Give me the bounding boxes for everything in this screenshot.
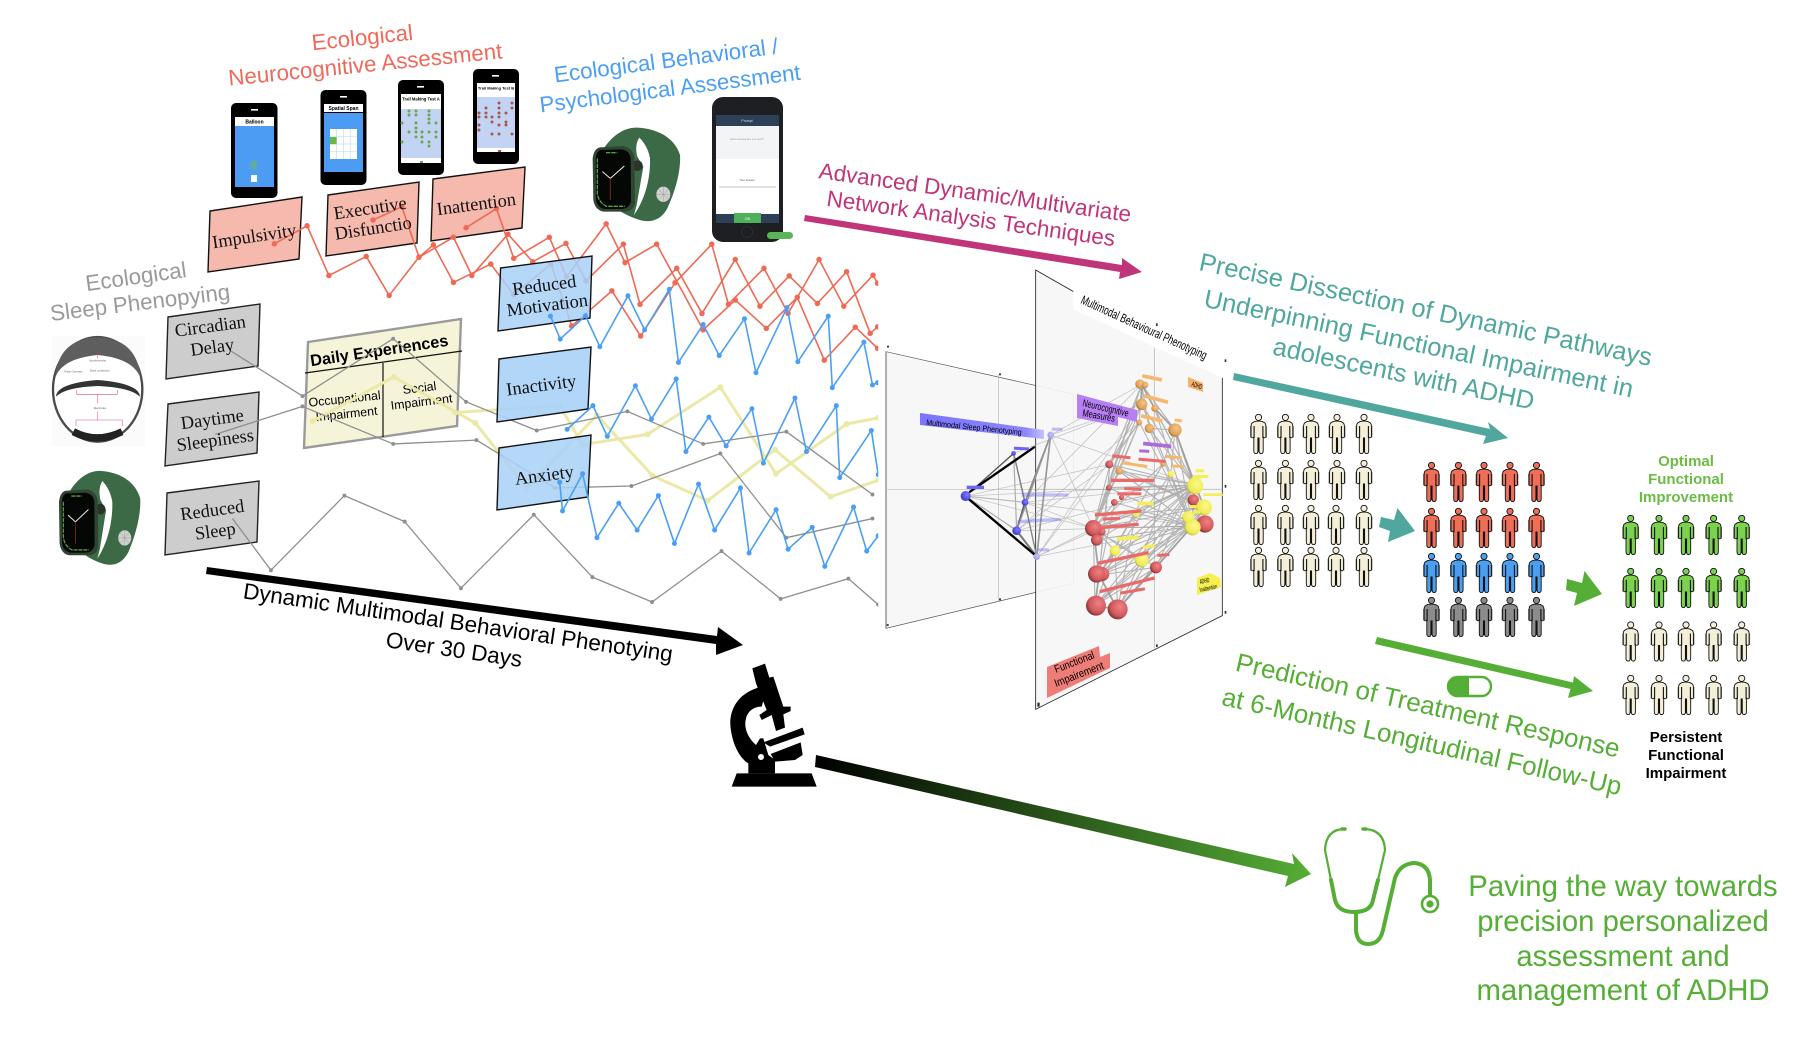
heading: precise dissection of dynamic pathways: Underpinning Functional Impairment in — [1202, 285, 1636, 403]
label: multimodal sleep phenotyping — [920, 413, 1044, 439]
label: ADHD inattention: Inattention — [1199, 583, 1218, 594]
panel: daily experiences: Daily Experiences — [309, 332, 450, 370]
phone: spatial span task — [320, 90, 366, 185]
panel: daily experiences — [304, 319, 462, 448]
arrow: green treatment prediction — [1375, 637, 1593, 698]
heading: precise dissection of dynamic pathways: Precise Dissection of Dynamic Pathways — [1197, 248, 1655, 372]
panel: executive dysfunction — [326, 182, 419, 256]
panel: impulsivity — [208, 197, 302, 272]
panel: daily experiences: Impairment — [390, 391, 454, 413]
panel: daytime sleepiness — [165, 392, 259, 466]
heading: ecological behavioral assessment: Ecological Behavioral / — [553, 34, 780, 87]
label: neurocognitive measures — [1077, 394, 1137, 426]
heading: ecological behavioral assessment — [538, 34, 803, 117]
label: functional impairement — [1047, 646, 1110, 698]
arrow: green small — [1566, 571, 1602, 606]
label: optimal functional improvement: Functional — [1648, 471, 1724, 488]
arrow: dynamic phenotyping black — [206, 567, 743, 655]
network: left plane sleep phenotyping — [886, 346, 1073, 628]
text: paving the way: management of ADHD — [1476, 974, 1770, 1007]
phone: psychological assessment app: How anxious are you now? — [730, 137, 764, 141]
phone: spatial span task: Spatial Span — [328, 106, 359, 112]
labels: symptom domain boxes: Delay — [189, 334, 236, 360]
heading: dynamic multimodal behavioral phenotyping: Dynamic Multimodal Behavioral Phenotying — [242, 579, 675, 667]
label: ADHD inattention: ADHD — [1199, 577, 1210, 586]
label: persistent functional impairment: Persistent — [1650, 729, 1722, 746]
panel: daily experiences: Social — [402, 379, 437, 397]
panel: daily experiences: Impairment — [315, 404, 379, 424]
text: paving the way — [1468, 870, 1778, 1007]
label: optimal functional improvement — [1639, 453, 1733, 506]
phone: trail making test B — [473, 69, 519, 164]
text: paving the way: precision personalized — [1477, 905, 1769, 938]
label: optimal functional improvement: Improvement — [1639, 489, 1733, 506]
panel: anxiety — [497, 435, 591, 510]
panel: daily experiences: Occupational — [308, 388, 381, 410]
label: persistent functional impairment — [1646, 729, 1726, 782]
heading: ecological behavioral assessment: Psychological Assessment — [538, 60, 803, 117]
phone: psychological assessment app: Your answer — [739, 178, 755, 182]
heading: ecological neurocognitive assessment: Ecological — [310, 20, 414, 55]
heading: prediction of treatment response: Prediction of Treatment Response — [1233, 647, 1623, 763]
network: behaviour nodes — [1085, 379, 1214, 619]
icon: sleep headband: Pulse Oximeter — [64, 370, 83, 374]
label: neurocognitive measures: Measures — [1081, 408, 1116, 425]
label: persistent functional impairment: Impairment — [1646, 765, 1726, 782]
network: inter-node edges — [966, 384, 1204, 609]
icon: sleep headband: Bone conduction — [90, 369, 110, 373]
labels: symptom domain boxes — [173, 189, 589, 544]
heading: ecological neurocognitive assessment: Neurocognitive Assessment — [227, 38, 504, 91]
label: optimal functional improvement: Optimal — [1658, 453, 1714, 470]
network: right plane behavioural phenotyping — [1036, 270, 1226, 709]
arrow: multivariate analysis — [804, 215, 1142, 279]
labels: symptom domain boxes: Reduced — [511, 271, 577, 299]
phone: psychological assessment app — [712, 97, 793, 242]
chart: red time series — [274, 207, 878, 360]
label: persistent functional impairment: Functional — [1648, 747, 1724, 764]
heading: precise dissection of dynamic pathways: adolescents with ADHD — [1270, 333, 1537, 416]
arrow: teal to subgroups — [1233, 373, 1508, 444]
label: ADHD — [1188, 377, 1203, 392]
icon: smartwatch large — [593, 128, 680, 221]
labels: symptom domain boxes: Inattention — [435, 189, 517, 219]
panel: inattention — [431, 167, 525, 241]
phone: psychological assessment app: Prompt — [741, 119, 753, 123]
people grid: dissected subgroups — [1424, 462, 1544, 637]
labels: symptom domain boxes: Disfunctio — [333, 212, 413, 244]
labels: symptom domain boxes: Impulsivity — [211, 220, 298, 252]
people grid: treatment outcomes — [1623, 515, 1749, 715]
phone: balloon task: Balloon — [245, 120, 264, 126]
icon: microscope — [730, 664, 817, 787]
labels: symptom domain boxes: Reduced — [179, 496, 245, 524]
label: functional impairement: Impairement — [1053, 660, 1106, 690]
icon: pill — [1448, 677, 1491, 696]
icon: sleep headband — [52, 336, 145, 446]
heading: network analysis techniques: Advanced Dynamic/Multivariate — [817, 158, 1133, 227]
arrow: microscope to stethoscope gradient — [815, 755, 1311, 887]
label: multimodal behavioural phenotyping: Multimodal Behavioural Phenotyping — [1079, 293, 1209, 363]
panel: circadian delay — [166, 304, 260, 379]
chart: yellow time series — [313, 377, 878, 501]
network: behaviour node labels — [1095, 374, 1223, 595]
phone: balloon task — [231, 103, 278, 198]
chart: grey time series — [215, 339, 878, 605]
phone: psychological assessment app: OK — [745, 216, 751, 221]
heading: dynamic multimodal behavioral phenotyping: Over 30 Days — [384, 627, 524, 672]
text: paving the way: assessment and — [1516, 940, 1730, 973]
labels: symptom domain boxes: Anxiety — [514, 461, 576, 489]
panel: reduced sleep — [165, 481, 259, 555]
heading: network analysis techniques: Network Analysis Techniques — [825, 186, 1117, 251]
heading: ecological sleep phenotyping — [49, 257, 231, 326]
people grid: adolescents with ADHD — [1251, 414, 1372, 587]
labels: symptom domain boxes: Sleepiness — [175, 425, 255, 455]
heading: ecological sleep phenotyping: Sleep Phenopying — [49, 279, 231, 326]
icon: sleep headband: Electrodes — [94, 406, 107, 410]
labels: symptom domain boxes: Daytime — [179, 405, 245, 433]
labels: symptom domain boxes: Executive — [332, 193, 408, 223]
labels: symptom domain boxes: Inactivity — [505, 370, 578, 400]
labels: symptom domain boxes: Motivation — [505, 290, 589, 320]
network: sleep nodes and edges — [961, 428, 1068, 560]
heading: ecological sleep phenotyping: Ecological — [84, 257, 188, 296]
label: multimodal sleep phenotyping: Multimodal Sleep Phenotyping — [926, 418, 1022, 437]
phone: trail making test B: Trail Making Test B — [478, 86, 514, 90]
icon: sleep headband: Accelerometer — [89, 359, 106, 363]
panel: inactivity — [497, 347, 591, 422]
chart: blue time series — [550, 289, 878, 566]
text: paving the way: Paving the way towards — [1468, 870, 1778, 903]
phone: trail making test A — [398, 80, 444, 175]
labels: symptom domain boxes: Circadian — [173, 311, 247, 341]
heading: prediction of treatment response: at 6-Months Longitudinal Follow-Up — [1219, 681, 1625, 801]
icon: stethoscope — [1325, 829, 1438, 944]
labels: symptom domain boxes: Sleep — [194, 518, 237, 544]
phone: trail making test A: Trail Making Test A — [402, 96, 440, 102]
label: ADHD inattention — [1197, 573, 1221, 595]
label: functional impairement: Functional — [1053, 650, 1096, 676]
label: ADHD: ADHD — [1190, 381, 1203, 391]
panel: reduced motivation — [498, 256, 592, 331]
label: neurocognitive measures: Neurocognitive — [1081, 398, 1130, 420]
icon: smartwatch small — [59, 471, 140, 565]
arrow: teal small — [1379, 508, 1415, 542]
